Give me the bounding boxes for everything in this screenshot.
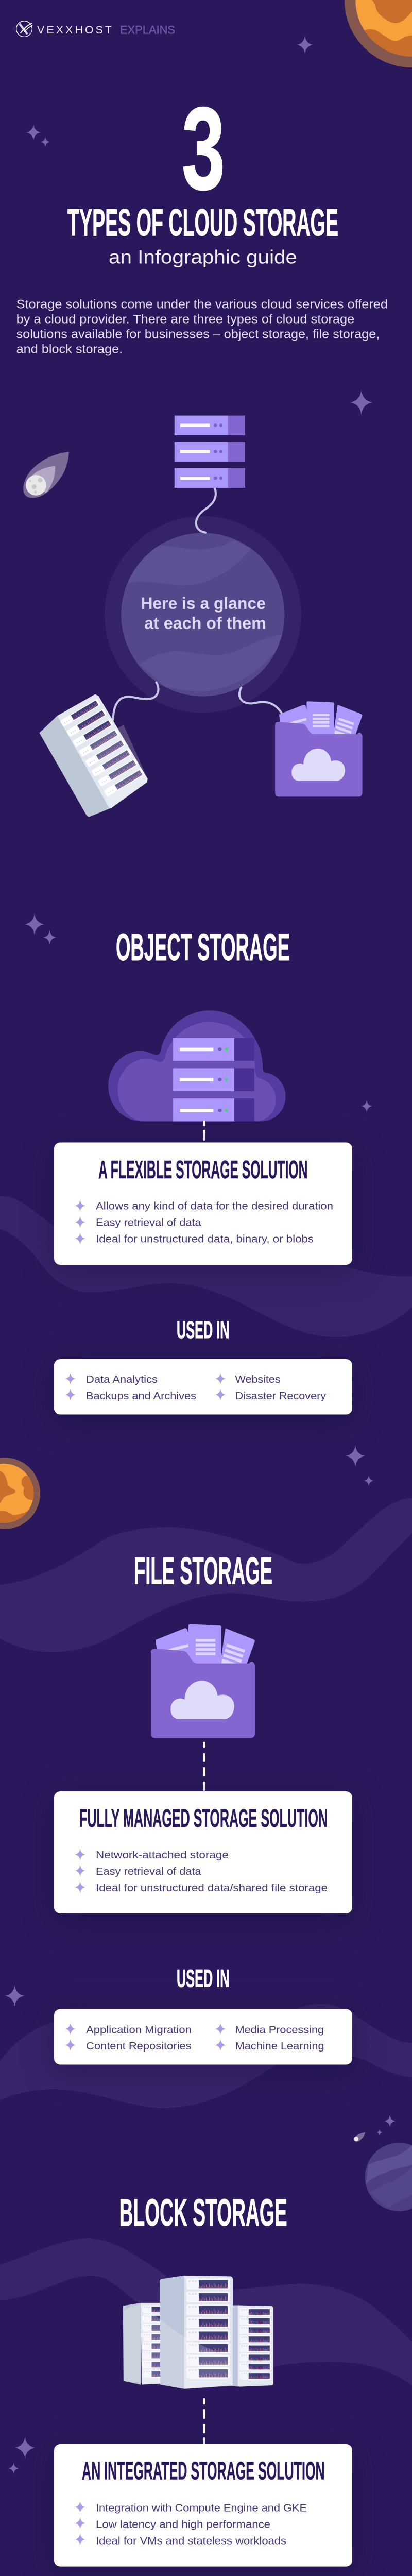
card: object storage uses: Websites <box>235 1374 281 1385</box>
dashed connector <box>203 2399 205 2444</box>
icon: folder with cloud <box>275 701 363 796</box>
card: object storage uses: Disaster Recovery <box>235 1391 326 1402</box>
bullet list: Network-attached storage <box>96 1850 229 1861</box>
icon: folder with cloud <box>151 1624 255 1738</box>
title <box>67 83 338 268</box>
bullet list: Ideal for unstructured data/shared file storage <box>96 1883 328 1894</box>
logo <box>16 21 175 37</box>
bullet list: Ideal for unstructured data, binary, or blobs <box>96 1234 314 1245</box>
intro text: and block storage. <box>16 343 123 357</box>
right rack <box>231 2305 273 2387</box>
card: file storage uses: Media Processing <box>235 2024 324 2036</box>
card: object storage uses: Data Analytics <box>86 1374 158 1385</box>
icon: tilted server rack <box>40 694 148 817</box>
heading: used in: USED IN <box>177 1965 230 1993</box>
bullet list: Easy retrieval of data <box>96 1866 202 1877</box>
center rack <box>160 2276 233 2389</box>
intro text: solutions available for businesses – object storage, file storage, <box>16 328 380 342</box>
icon: logo mark <box>16 21 32 37</box>
card: file storage uses: Content Repositories <box>86 2041 192 2052</box>
icon: cloud server <box>108 1010 286 1122</box>
bullet list <box>75 1849 328 1894</box>
planet: orange top right <box>345 0 412 67</box>
glance text <box>141 594 266 632</box>
wordmark: VEXXHOST <box>37 24 112 36</box>
card: fully managed storage solution <box>54 1791 352 1913</box>
heading: used in: USED IN <box>177 1317 230 1344</box>
intro text <box>16 298 388 357</box>
section: object storage <box>54 926 352 1415</box>
bullet list: Easy retrieval of data <box>96 1217 202 1229</box>
section: file storage: FILE STORAGE <box>134 1550 272 1592</box>
comet: upper left <box>23 452 69 498</box>
card: object storage uses <box>54 1359 352 1415</box>
comet: small right <box>354 2132 365 2142</box>
bullet list: Integration with Compute Engine and GKE <box>96 2503 307 2514</box>
section: block storage <box>54 2191 352 2576</box>
bullet list: Low latency and high performance <box>96 2519 270 2531</box>
intro text: Storage solutions come under the various cloud services offered <box>16 298 388 311</box>
planet: orange left middle <box>0 1458 40 1529</box>
card: object storage uses: Backups and Archives <box>86 1391 196 1402</box>
big number: 3 <box>182 83 225 214</box>
bullet list: Allows any kind of data for the desired duration <box>96 1200 333 1212</box>
subtitle: an Infographic guide <box>109 247 297 268</box>
glance text: at each of them <box>144 614 266 632</box>
section: file storage <box>54 1550 352 2065</box>
icon: server racks <box>123 2276 273 2389</box>
card: file storage uses <box>54 2009 352 2065</box>
bullet list <box>75 2501 307 2547</box>
background waves <box>0 1196 412 2576</box>
cables <box>113 488 282 720</box>
bullet list: Ideal for VMs and stateless workloads <box>96 2535 286 2547</box>
bullet list <box>75 1200 333 1245</box>
planet: central glance planet <box>105 516 301 713</box>
card: file storage uses: Application Migration <box>86 2024 192 2036</box>
label: explains: EXPLAINS <box>120 24 175 36</box>
left rack <box>123 2303 175 2385</box>
icon: server stack <box>175 416 245 488</box>
intro text: by a cloud provider. There are three types of cloud storage <box>16 312 354 327</box>
card: file storage uses: Machine Learning <box>235 2041 324 2052</box>
dashed connector <box>203 1122 205 1140</box>
glance diagram <box>40 416 363 817</box>
planet: purple right <box>365 2143 412 2211</box>
glance text: Here is a glance <box>141 594 266 613</box>
card: integrated storage solution <box>54 2444 352 2567</box>
dashed connector <box>203 1743 205 1790</box>
card: flexible storage solution <box>54 1143 352 1265</box>
